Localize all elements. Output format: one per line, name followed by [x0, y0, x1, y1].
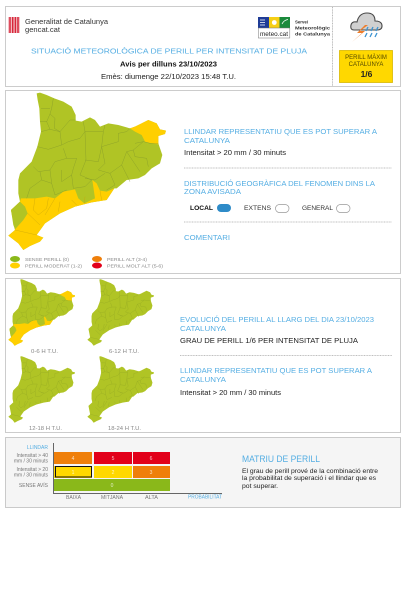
- legend: SENSE PERILL (0): [25, 257, 69, 263]
- text: threshold: LLINDAR REPRESENTATIU QUE ES POT SUPERAR A: [184, 127, 377, 136]
- matrix row labels: SENSE AVÍS: [19, 482, 49, 489]
- time labels: [29, 349, 141, 432]
- Generalitat name: Generalitat de Catalunya: [25, 17, 109, 26]
- box: maximum danger: 1/6: [361, 69, 373, 79]
- time labels: 0-6 H T.U.: [31, 349, 59, 355]
- text: geographic distribution: [184, 179, 375, 196]
- text: threshold: [184, 127, 377, 157]
- text: threshold: Intensitat > 20 mm / 30 minuts: [184, 150, 287, 157]
- matrix cells: 2: [112, 470, 115, 476]
- text: threshold: CATALUNYA: [180, 375, 226, 384]
- matrix row labels: Intensitat > 40: [16, 453, 48, 459]
- Servei Meteorològic name: Servei: [295, 20, 308, 26]
- map: 18-24 h: [87, 356, 154, 423]
- date of warning: Avis per dilluns 23/10/2023: [120, 62, 217, 68]
- matrix cells: 6: [150, 456, 153, 462]
- map: Catalonia danger today: [8, 93, 166, 250]
- probability labels: MITJANA: [101, 495, 124, 501]
- Servei Meteorològic name: de Catalunya: [295, 32, 330, 38]
- box: maximum danger: CATALUNYA: [349, 62, 383, 68]
- title: SITUACIÓ METEOROLÒGICA DE PERILL PER INTENSITAT DE PLUJA: [31, 46, 307, 56]
- probability labels: [66, 494, 222, 501]
- panel: evolution during the day: [6, 278, 400, 432]
- matrix explanation: la probabilitat de superació i el llindar que es: [242, 475, 377, 482]
- matrix row labels: mm / 30 minuts: [14, 458, 48, 464]
- text: threshold: LLINDAR REPRESENTATIU QUE ES POT SUPERAR A: [180, 366, 372, 375]
- panel: danger matrix: [6, 438, 400, 508]
- text: evolution: CATALUNYA: [180, 324, 226, 333]
- Servei Meteorològic name: [295, 20, 330, 38]
- text: geographic distribution: DISTRIBUCIÓ GEOGRÀFICA DEL FENOMEN DINS LA: [184, 179, 375, 188]
- text: comments: COMENTARI: [184, 233, 230, 242]
- map: 6-12 h: [87, 279, 154, 346]
- probability labels: ALTA: [145, 495, 159, 501]
- text: threshold: CATALUNYA: [184, 136, 230, 145]
- matrix heading: MATRIU DE PERILL: [242, 454, 320, 464]
- Generalitat name: [25, 17, 109, 34]
- time labels: 18-24 H T.U.: [108, 426, 141, 432]
- text: threshold: [180, 366, 372, 397]
- box: maximum danger: [340, 50, 392, 82]
- map: 12-18 h: [8, 356, 75, 423]
- Generalitat name: gencat.cat: [25, 25, 60, 34]
- legend: PERILL MOLT ALT (5-6): [107, 264, 163, 270]
- probability labels: BAIXA: [66, 495, 82, 501]
- matrix row labels: mm / 30 minuts: [14, 472, 48, 478]
- matrix explanation: pot superar.: [242, 483, 278, 490]
- matrix cells: 4: [72, 456, 75, 462]
- legend: PERILL ALT (3-4): [107, 257, 147, 263]
- logo: meteo.cat: [258, 17, 290, 38]
- matrix cells: 0: [111, 483, 114, 489]
- icon: storm cloud with rain: [351, 13, 382, 42]
- issue date: Emès: diumenge 22/10/2023 15:48 T.U.: [101, 74, 236, 81]
- matrix axes: [54, 443, 222, 494]
- distribution selector: EXTENS: [244, 206, 271, 212]
- matrix explanation: [242, 468, 378, 490]
- matrix row labels: Intensitat > 20: [16, 467, 48, 473]
- matrix explanation: El grau de perill prové de la combinació entre: [242, 468, 378, 475]
- text: evolution: EVOLUCIÓ DEL PERILL AL LLARG DEL DIA 23/10/2023: [180, 315, 374, 324]
- panel: main map and threshold: [6, 90, 400, 274]
- matrix row labels: [14, 445, 49, 489]
- distribution selector: LOCAL: [190, 206, 213, 212]
- map: 0-6 h: [8, 279, 75, 346]
- Servei Meteorològic name: Meteorològic: [295, 26, 330, 32]
- matrix cells: 3: [150, 470, 153, 476]
- text: evolution: [180, 315, 374, 345]
- time labels: 6-12 H T.U.: [109, 349, 140, 355]
- matrix cells: 5: [112, 456, 115, 462]
- icon: Generalitat crest: [8, 17, 20, 33]
- distribution selector: [190, 204, 350, 212]
- text: evolution: GRAU DE PERILL 1/6 PER INTENSITAT DE PLUJA: [180, 338, 358, 345]
- probability labels: PROBABILITAT: [188, 494, 222, 500]
- text: threshold: Intensitat > 20 mm / 30 minuts: [180, 390, 282, 397]
- matrix cells: [54, 452, 170, 491]
- text: geographic distribution: ZONA AVISADA: [184, 187, 241, 196]
- logo: meteo.cat: meteo.cat: [260, 32, 288, 38]
- matrix row labels: LLINDAR: [27, 445, 48, 451]
- box: maximum danger: PERILL MÀXIM: [345, 54, 387, 61]
- matrix cells: 1: [72, 470, 75, 476]
- distribution selector: GENERAL: [302, 206, 334, 212]
- legend: PERILL MODERAT (1-2): [25, 264, 82, 270]
- panel: header: [6, 6, 400, 86]
- legend: [10, 256, 163, 270]
- time labels: 12-18 H T.U.: [29, 426, 62, 432]
